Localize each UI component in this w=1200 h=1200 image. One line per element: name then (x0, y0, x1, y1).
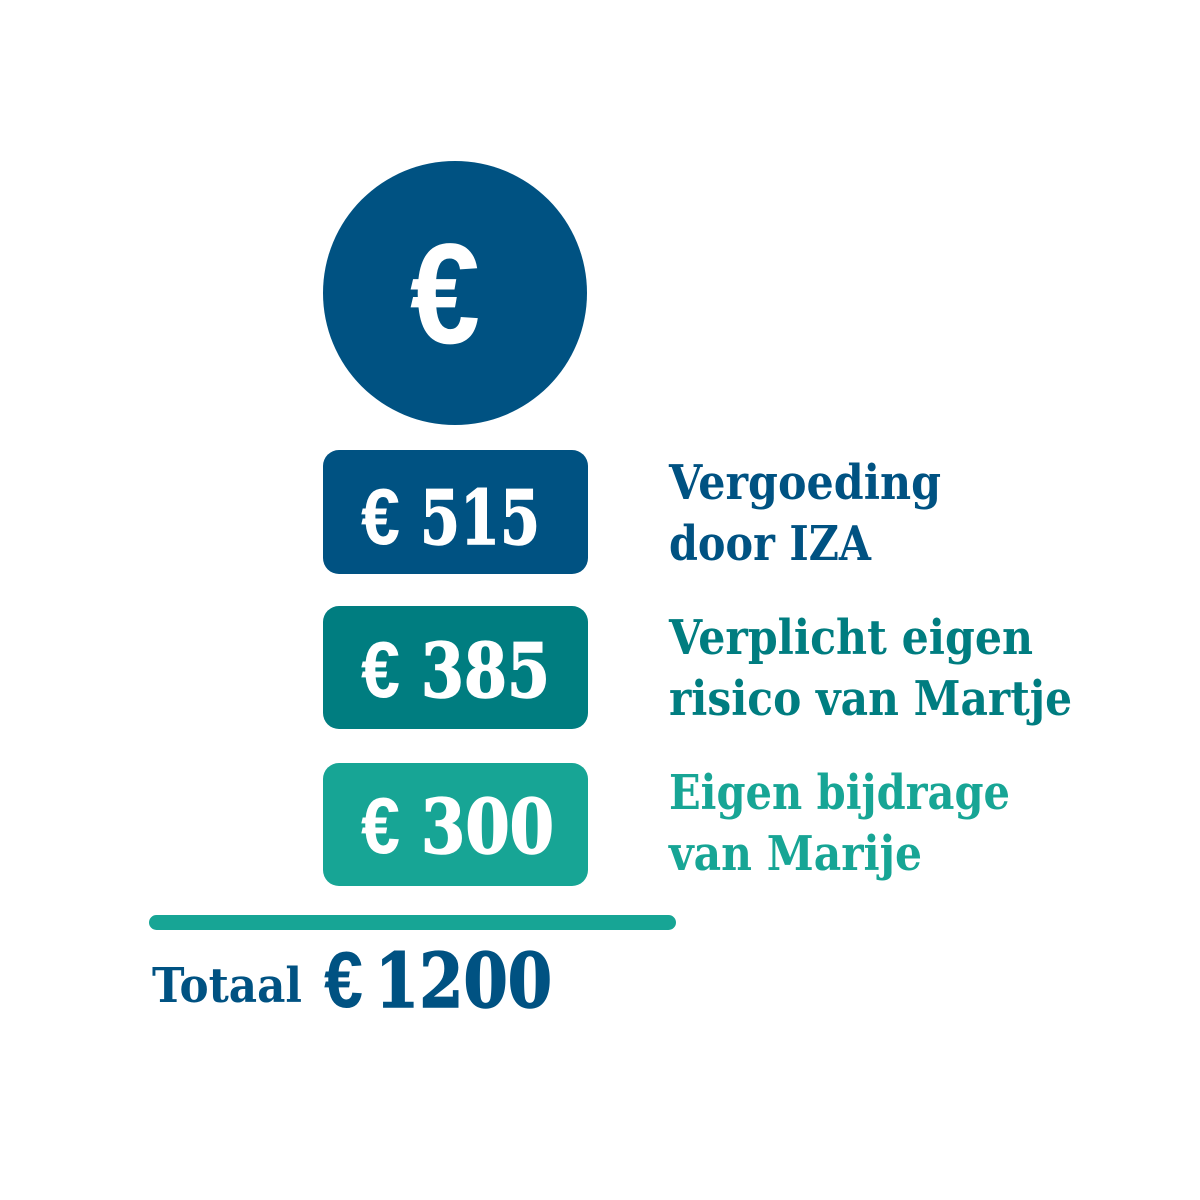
label: Vergoeding door IZA: door IZA (669, 516, 872, 572)
total label: Totaal (152, 958, 302, 1014)
amount box: 515 (323, 450, 588, 574)
amount box: 385: 385 (421, 627, 550, 715)
total amount: € (324, 935, 363, 1024)
amount box: 300: € (361, 781, 400, 870)
label: Verplicht eigen risico van Martje: Verplicht eigen (668, 610, 1033, 666)
amount box: 385 (323, 606, 588, 729)
icon: euro coin (323, 161, 587, 425)
label: Eigen bijdrage van Marije: Eigen bijdrage (669, 765, 1010, 821)
label: Vergoeding door IZA: Vergoeding (668, 455, 941, 511)
amount box: 515: € (361, 472, 400, 561)
label: Eigen bijdrage van Marije: van Marije (668, 826, 922, 882)
label: Verplicht eigen risico van Martje: risico van Martje (669, 671, 1072, 727)
label: Vergoeding door IZA (668, 455, 941, 572)
amount box: 300: 300 (421, 783, 554, 871)
amount box: 515: 515 (420, 474, 540, 562)
total amount (324, 935, 552, 1025)
label: Verplicht eigen risico van Martje (668, 610, 1072, 727)
label: Eigen bijdrage van Marije (668, 765, 1010, 882)
icon: euro coin: € (410, 215, 480, 374)
total line (149, 915, 676, 930)
amount box: 300 (323, 763, 588, 886)
amount box: 385: € (361, 625, 400, 714)
total amount: 1200 (375, 937, 552, 1025)
